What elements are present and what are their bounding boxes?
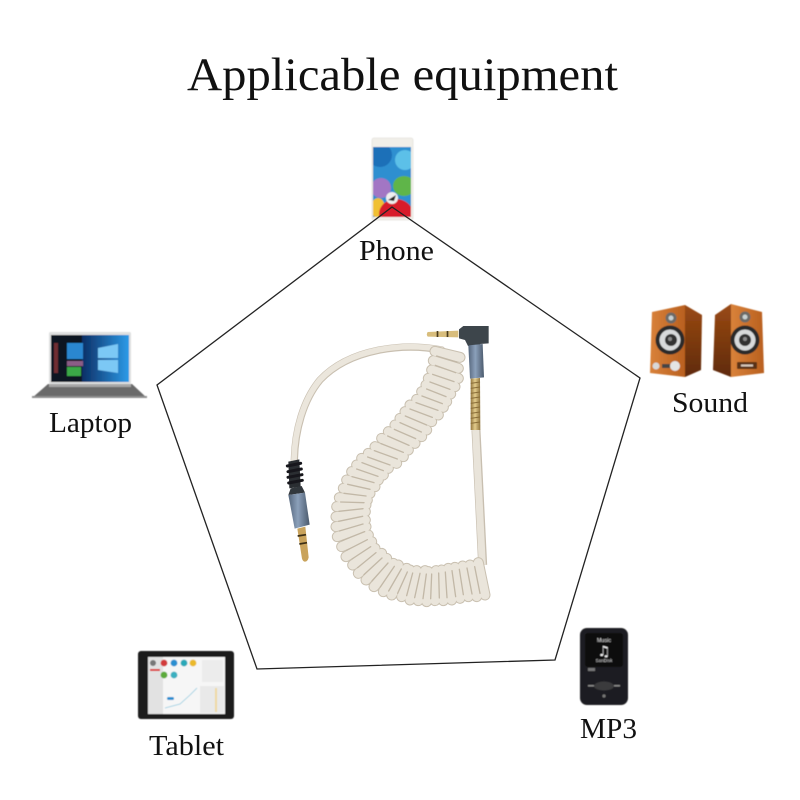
- right speaker: [713, 304, 764, 377]
- icon: tablet: [138, 651, 234, 719]
- label: Phone: Phone: [359, 235, 434, 267]
- icon: speakers: [650, 304, 764, 377]
- pentagon outline: [157, 207, 640, 669]
- thin cable section: [294, 347, 442, 460]
- product: coiled audio cable: [287, 326, 489, 602]
- left speaker: [650, 305, 702, 377]
- label: MP3: MP3: [580, 713, 637, 745]
- straight cable section: [476, 430, 483, 565]
- coil section: [336, 351, 485, 602]
- icon: MP3 player: Music: [597, 638, 611, 644]
- icon: MP3 player: [580, 628, 628, 705]
- icon: MP3 player: ♫: [598, 644, 610, 660]
- straight jack: [287, 459, 310, 562]
- label: Laptop: Laptop: [49, 407, 132, 439]
- right-angle jack: [427, 326, 489, 430]
- label: Sound: Sound: [672, 387, 748, 419]
- icon: phone: [371, 138, 414, 220]
- label: Tablet: Tablet: [149, 731, 224, 762]
- icon: laptop: [32, 332, 147, 398]
- title: Applicable equipment: [187, 49, 618, 101]
- icon: MP3 player: SanDisk: [596, 658, 613, 663]
